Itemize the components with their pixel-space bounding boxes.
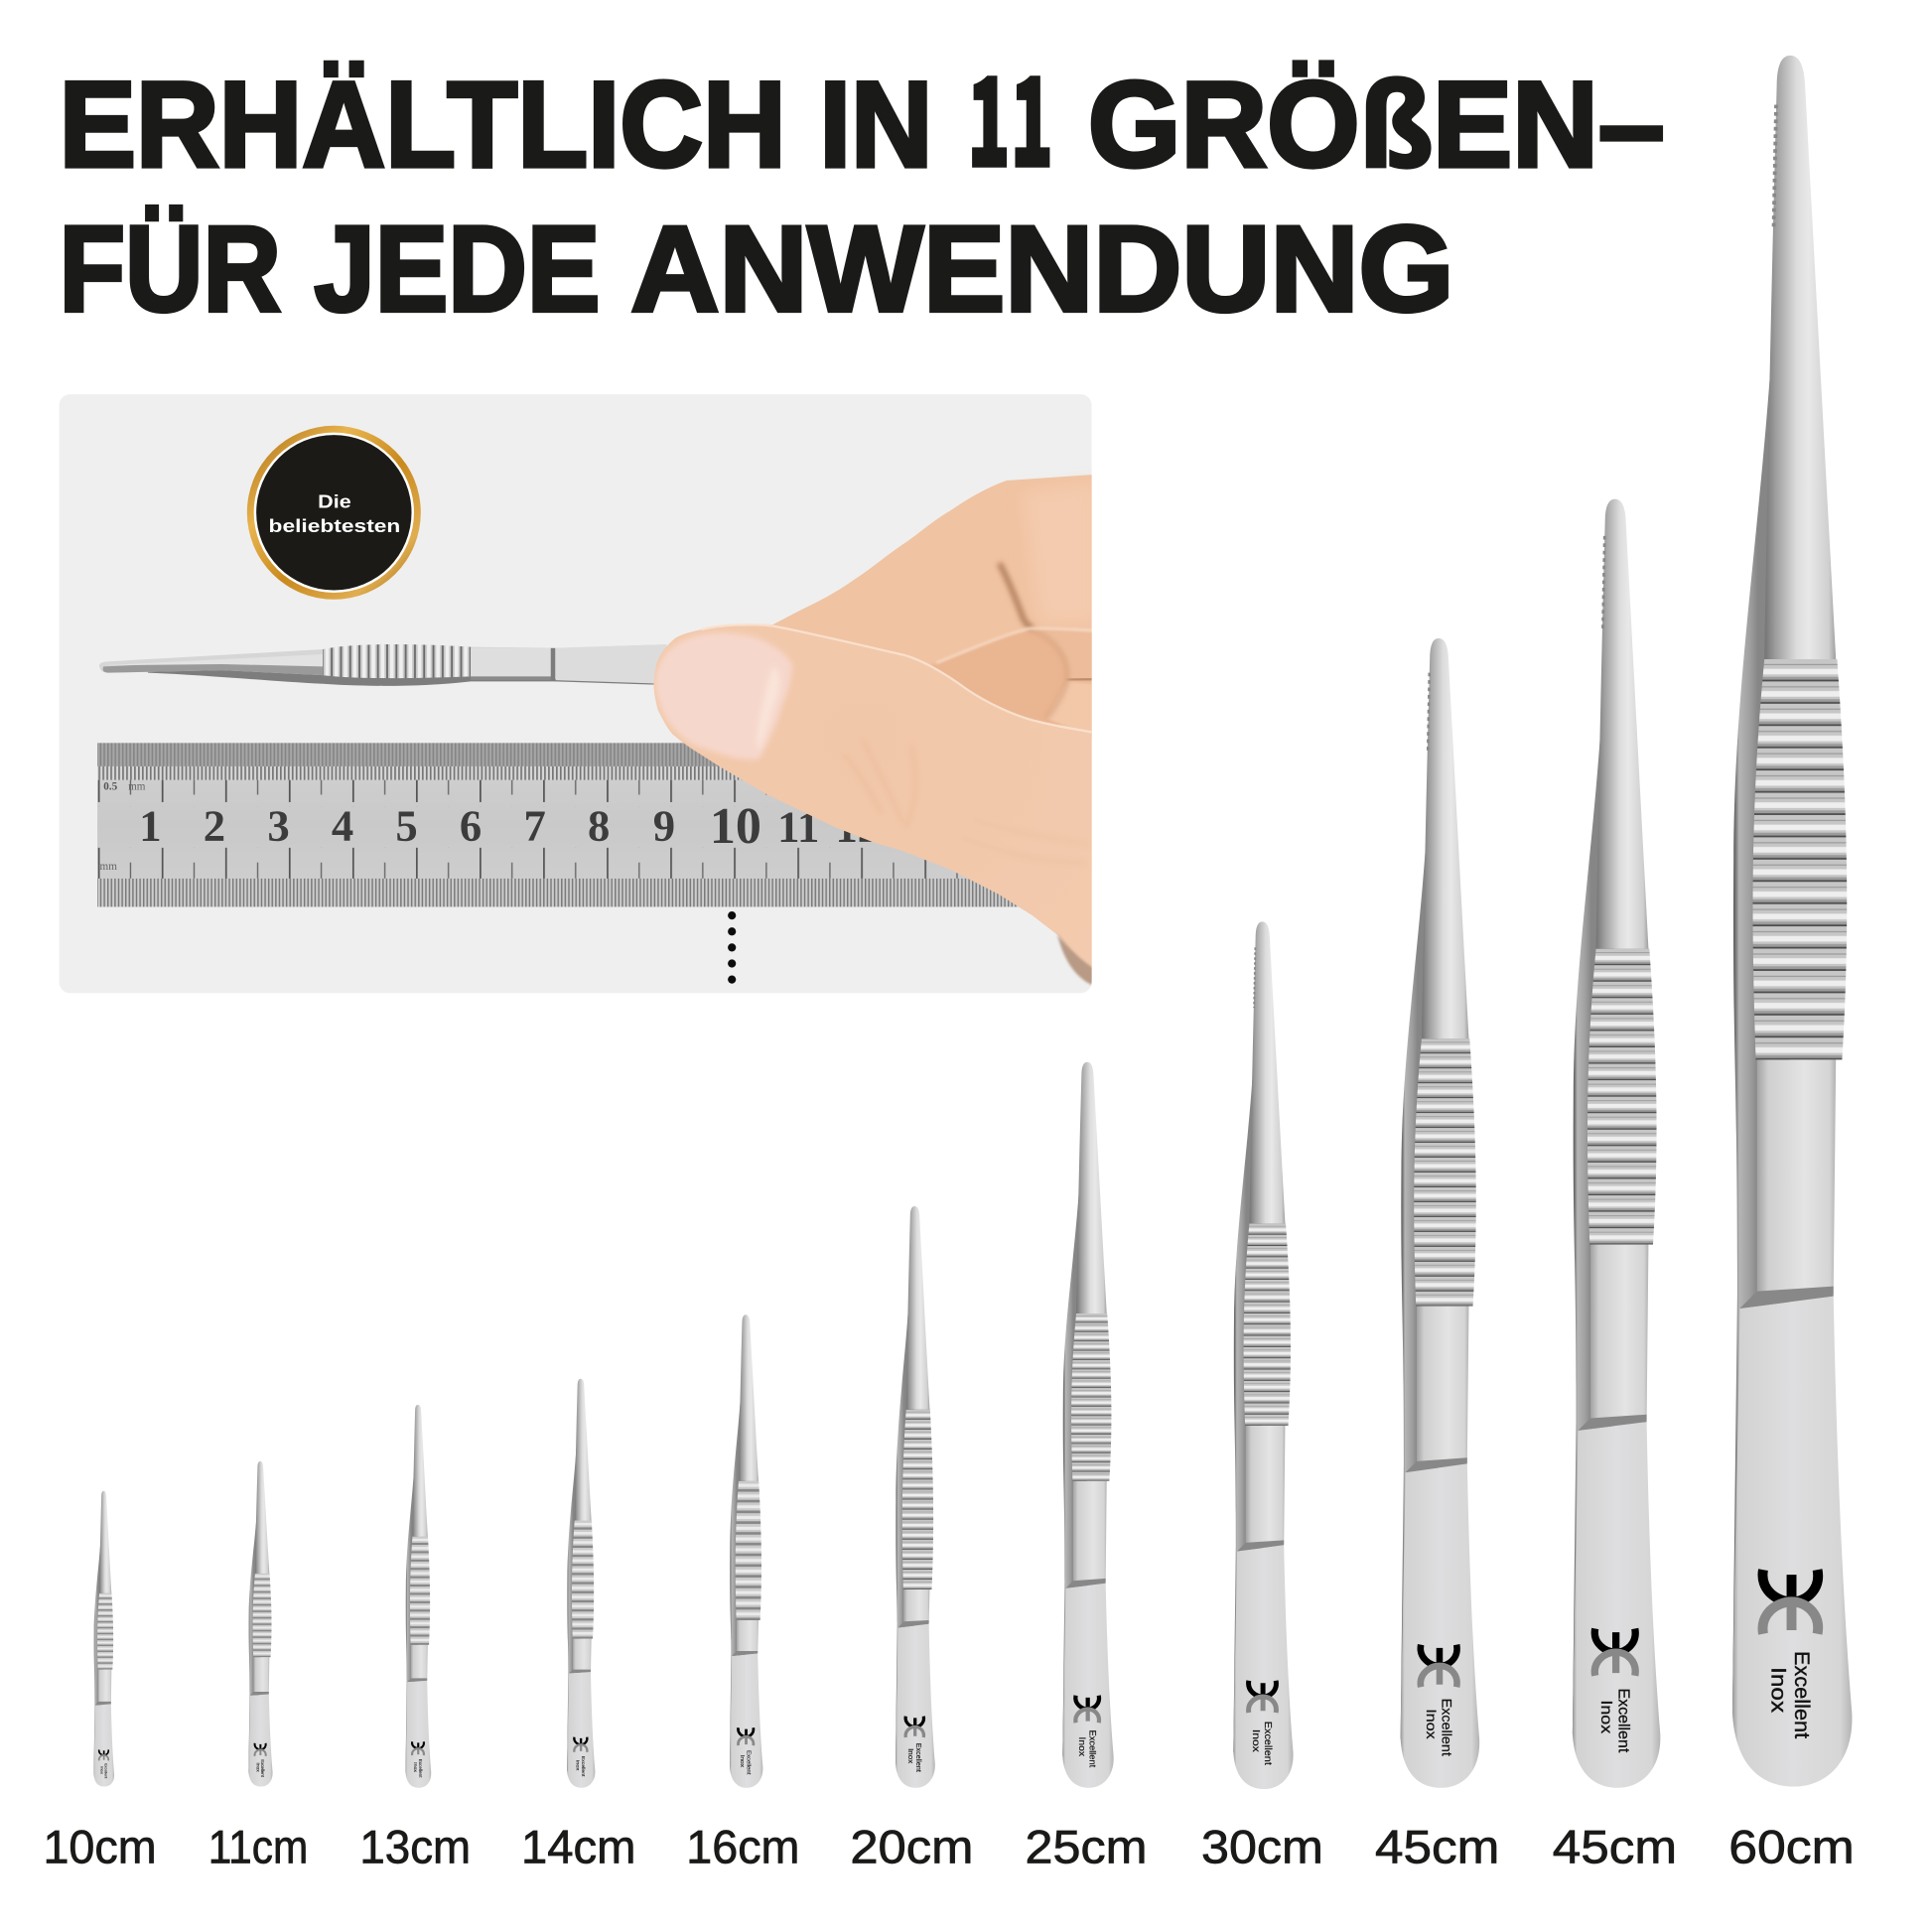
tweezer 11cm [248, 1461, 273, 1787]
ruler [97, 743, 1034, 906]
tweezer 30cm [1233, 921, 1294, 1789]
tweezer 10cm [94, 1491, 114, 1787]
label 45cm second: 45cm [1553, 1821, 1677, 1873]
ruler: 10 [710, 798, 761, 855]
ruler: 8 [588, 800, 610, 850]
tweezer 45cm second [1573, 499, 1660, 1788]
badge: die beliebtesten: beliebtesten [269, 515, 400, 536]
tweezer 16cm [730, 1314, 762, 1788]
label 30cm: 30cm [1201, 1821, 1323, 1873]
tweezer 30cm: Excellent [1262, 1722, 1274, 1765]
tweezer 14cm: Excellent [580, 1756, 586, 1777]
tweezer 45cm first: Excellent [1439, 1699, 1454, 1756]
tweezer 60cm: Inox [1767, 1667, 1790, 1714]
title: FÜR [60, 202, 281, 338]
dotted marker [728, 911, 736, 984]
panel: size reference photo [60, 394, 1097, 993]
tweezer 25cm: Inox [1077, 1737, 1087, 1757]
tweezer 11cm: Excellent [260, 1759, 265, 1778]
ruler: 4 [332, 800, 353, 850]
badge: die beliebtesten [247, 426, 421, 600]
ruler: 7 [523, 800, 546, 850]
ruler: 9 [653, 800, 675, 850]
tweezer 20cm: Excellent [914, 1743, 921, 1772]
ruler: 6 [460, 800, 482, 850]
ruler: 12 [835, 802, 880, 852]
tweezer 45cm second: Inox [1597, 1700, 1614, 1733]
tweezer 10cm: Inox [99, 1766, 103, 1774]
tweezer 11cm: Inox [255, 1762, 260, 1773]
ruler: 0.5 [103, 781, 118, 793]
ruler: mm [100, 861, 117, 873]
ruler: 5 [395, 800, 418, 850]
tweezer 25cm: Excellent [1087, 1730, 1097, 1768]
tweezer 16cm: Excellent [746, 1750, 752, 1775]
title: 11 [967, 24, 1053, 203]
horizontal tweezers [99, 644, 666, 686]
tweezer 60cm [1732, 56, 1852, 1787]
tweezer 10cm: Excellent [103, 1763, 107, 1778]
ruler: 3 [267, 800, 290, 850]
tweezer 13cm: Excellent [418, 1759, 423, 1778]
label 25cm: 25cm [1026, 1821, 1147, 1873]
tweezer 14cm: Inox [574, 1760, 580, 1771]
title: ANWENDUNG [630, 202, 1453, 338]
label 14cm: 14cm [521, 1821, 635, 1873]
title [60, 24, 1665, 338]
label 11cm: 11cm [208, 1821, 308, 1873]
tweezer 45cm first [1401, 638, 1479, 1788]
label 45cm first: 45cm [1375, 1821, 1499, 1873]
ruler: 2 [204, 800, 225, 850]
label 16cm: 16cm [686, 1821, 799, 1873]
title: JEDE [314, 202, 600, 338]
tweezer 20cm: Inox [906, 1748, 913, 1764]
ruler: mm [128, 781, 146, 793]
title: ERHÄLTLICH [60, 58, 786, 194]
tweezer 30cm: Inox [1250, 1729, 1262, 1753]
title: GRÖßEN– [1088, 58, 1665, 194]
hand [654, 475, 1097, 986]
ruler: 1 [139, 800, 162, 850]
tweezer 16cm: Inox [739, 1754, 745, 1767]
label 13cm: 13cm [359, 1821, 471, 1873]
title: IN [819, 58, 932, 194]
ruler: 11 [777, 802, 819, 852]
label 60cm: 60cm [1728, 1821, 1855, 1873]
tweezer 13cm [406, 1405, 431, 1788]
tweezer 25cm [1062, 1062, 1114, 1788]
tweezer 45cm first: Inox [1424, 1709, 1440, 1739]
label 10cm: 10cm [43, 1821, 157, 1873]
tweezer 45cm second: Excellent [1614, 1689, 1631, 1753]
tweezer 20cm [896, 1206, 935, 1788]
badge: die beliebtesten: Die [318, 490, 351, 511]
tweezer 60cm: Excellent [1790, 1651, 1813, 1738]
tweezer 13cm: Inox [413, 1762, 418, 1773]
tweezer 14cm [567, 1379, 595, 1788]
label 20cm: 20cm [850, 1821, 973, 1873]
